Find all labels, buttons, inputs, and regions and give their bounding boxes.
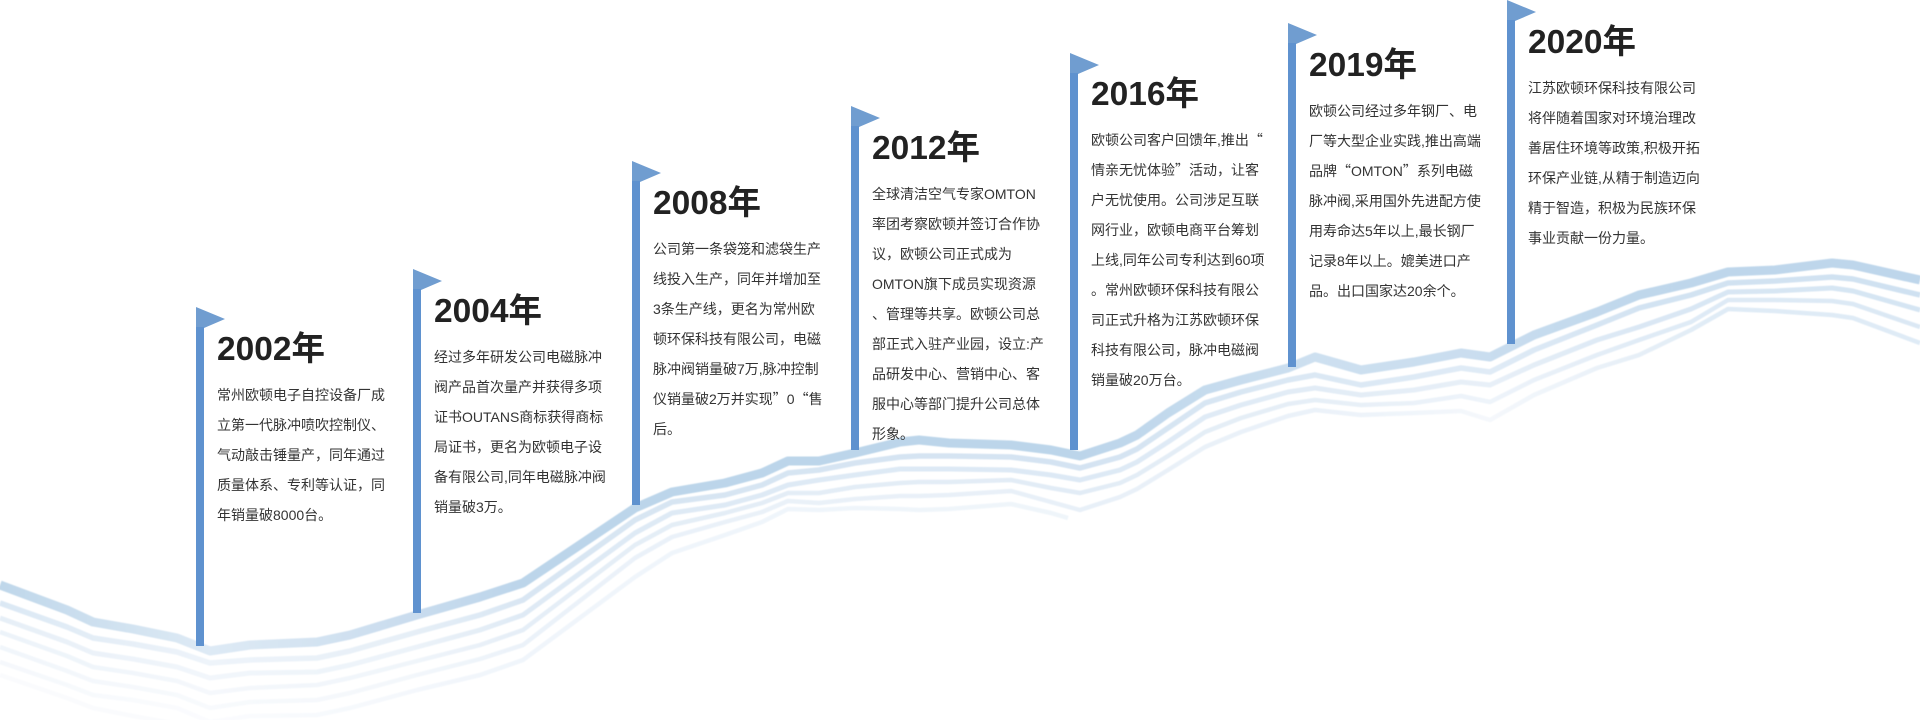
flag: 2002: [196, 307, 225, 646]
text: 2019 description: 记录8年以上。媲美进口产: [1309, 253, 1471, 269]
text: 2019 description: 欧顿公司经过多年钢厂、电: [1309, 103, 1477, 119]
text: 2016 description: 科技有限公司，脉冲电磁阀: [1091, 342, 1259, 358]
text: 2019 description: [1309, 103, 1481, 299]
text: 2016 description: 网行业，欧顿电商平台筹划: [1091, 222, 1259, 238]
text: 2016 description: 户无忧使用。公司涉足互联: [1091, 192, 1259, 208]
text: 2019 description: 品。出口国家达20余个。: [1309, 283, 1465, 299]
text: 2008 description: 公司第一条袋笼和滤袋生产: [653, 241, 821, 257]
text: 2019 description: 用寿命达5年以上,最长钢厂: [1309, 223, 1475, 239]
text: 2020 description: 将伴随着国家对环境治理改: [1528, 110, 1696, 126]
milestone: 2008: [653, 185, 823, 437]
text: 2004 description: [434, 349, 606, 515]
text: 2004 description: 阀产品首次量产并获得多项: [434, 379, 602, 395]
milestone: 2020: [1528, 24, 1700, 246]
heading: 2004年: 2004年: [434, 293, 542, 330]
text: 2002 description: 气动敲击锤量产，同年通过: [217, 447, 385, 463]
text: 2012 description: 全球清洁空气专家OMTON: [872, 186, 1036, 202]
flag: 2008: [632, 161, 661, 505]
text: 2012 description: 、管理等共享。欧顿公司总: [872, 306, 1040, 322]
text: 2002 description: 立第一代脉冲喷吹控制仪、: [217, 417, 385, 433]
text: 2008 description: 后。: [653, 421, 681, 437]
text: 2012 description: 形象。: [872, 426, 914, 442]
text: 2012 description: OMTON旗下成员实现资源: [872, 276, 1036, 292]
text: 2020 description: 事业贡献一份力量。: [1528, 230, 1654, 246]
text: 2004 description: 销量破3万。: [434, 499, 512, 515]
text: 2020 description: 环保产业链,从精于制造迈向: [1528, 170, 1700, 186]
text: 2019 description: 厂等大型企业实践,推出高端: [1309, 133, 1481, 149]
text: 2016 description: 欧顿公司客户回馈年,推出“: [1091, 130, 1263, 150]
milestone: 2016: [1091, 76, 1264, 388]
heading: 2002年: 2002年: [217, 331, 325, 368]
text: 2012 description: [872, 186, 1044, 442]
text: 2008 description: 脉冲阀销量破7万,脉冲控制: [653, 361, 819, 377]
text: 2012 description: 部正式入驻产业园，设立:产: [872, 336, 1044, 352]
flag: 2004: [413, 269, 442, 613]
text: 2016 description: 情亲无忧体验”活动，让客: [1091, 160, 1259, 180]
milestone: 2002: [217, 331, 385, 523]
text: 2008 description: 3条生产线，更名为常州欧: [653, 301, 815, 317]
text: 2016 description: 司正式升格为江苏欧顿环保: [1091, 312, 1259, 328]
heading: 2020年: 2020年: [1528, 24, 1636, 61]
text: 2016 description: 销量破20万台。: [1091, 372, 1191, 388]
milestone: 2004: [434, 293, 606, 515]
text: 2004 description: 备有限公司,同年电磁脉冲阀: [434, 469, 606, 485]
text: 2008 description: 顿环保科技有限公司，电磁: [653, 331, 821, 347]
flag: 2012: [851, 106, 880, 450]
heading: 2008年: 2008年: [653, 185, 761, 222]
text: 2019 description: 脉冲阀,采用国外先进配方使: [1309, 193, 1481, 209]
heading: 2012年: 2012年: [872, 130, 980, 167]
text: 2012 description: 服中心等部门提升公司总体: [872, 396, 1040, 412]
text: 2002 description: 常州欧顿电子自控设备厂成: [217, 387, 385, 403]
text: 2004 description: 经过多年研发公司电磁脉冲: [434, 349, 602, 365]
text: 2016 description: 。常州欧顿环保科技有限公: [1091, 282, 1259, 298]
heading: 2016年: 2016年: [1091, 76, 1199, 113]
text: 2020 description: [1528, 80, 1700, 246]
flag: 2016: [1070, 53, 1099, 450]
text: 2012 description: 率团考察欧顿并签订合作协: [872, 216, 1040, 232]
text: 2002 description: 质量体系、专利等认证，同: [217, 477, 385, 493]
text: 2020 description: 善居住环境等政策,积极开拓: [1528, 140, 1700, 156]
milestone: 2019: [1309, 47, 1481, 299]
text: 2020 description: 精于智造，积极为民族环保: [1528, 200, 1696, 216]
text: 2002 description: [217, 387, 385, 523]
text: 2016 description: [1091, 130, 1264, 388]
milestone: 2012: [872, 130, 1044, 442]
text: 2012 description: 品研发中心、营销中心、客: [872, 366, 1040, 382]
heading: 2019年: 2019年: [1309, 47, 1417, 84]
text: 2002 description: 年销量破8000台。: [217, 507, 332, 523]
text: 2008 description: [653, 241, 823, 437]
text: 2008 description: 线投入生产，同年并增加至: [653, 271, 821, 287]
text: 2016 description: 上线,同年公司专利达到60项: [1091, 252, 1264, 268]
flag: 2020: [1507, 0, 1536, 344]
flag: 2019: [1288, 23, 1317, 367]
text: 2012 description: 议，欧顿公司正式成为: [872, 246, 1012, 262]
text: 2004 description: 局证书，更名为欧顿电子设: [434, 439, 602, 455]
text: 2008 description: 仪销量破2万并实现”0“售: [653, 389, 823, 409]
text: 2004 description: 证书OUTANS商标获得商标: [434, 409, 603, 425]
text: 2020 description: 江苏欧顿环保科技有限公司: [1528, 80, 1696, 96]
text: 2019 description: 品牌“OMTON”系列电磁: [1309, 161, 1473, 181]
